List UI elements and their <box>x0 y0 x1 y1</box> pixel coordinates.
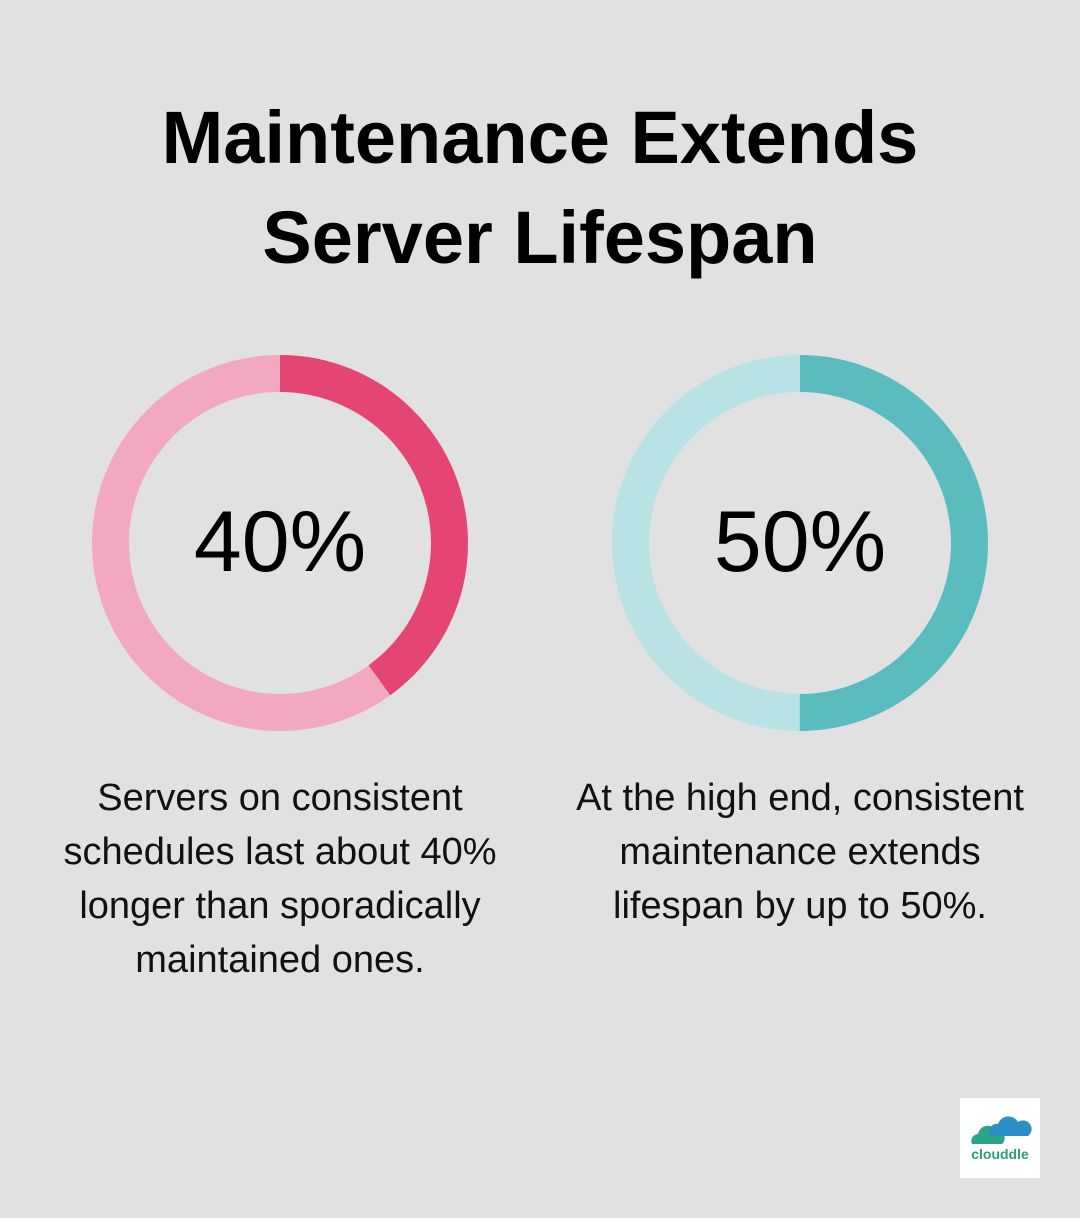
title <box>162 96 918 279</box>
logo: clouddle <box>971 1146 1029 1162</box>
text: 40% description: Servers on consistent schedules last about 40% longer than sporadically maintained ones. <box>63 777 497 981</box>
donut chart: 40%: 40% <box>194 494 366 590</box>
title: Maintenance Extends <box>162 96 918 179</box>
logo <box>960 1098 1040 1178</box>
donut chart: 50% <box>612 355 988 731</box>
donut chart: 40% <box>92 355 468 731</box>
donut chart: 50%: 50% <box>714 494 886 590</box>
text: 50% description: At the high end, consistent maintenance extends lifespan by up to 50%. <box>576 777 1024 927</box>
title: Server Lifespan <box>262 196 818 279</box>
